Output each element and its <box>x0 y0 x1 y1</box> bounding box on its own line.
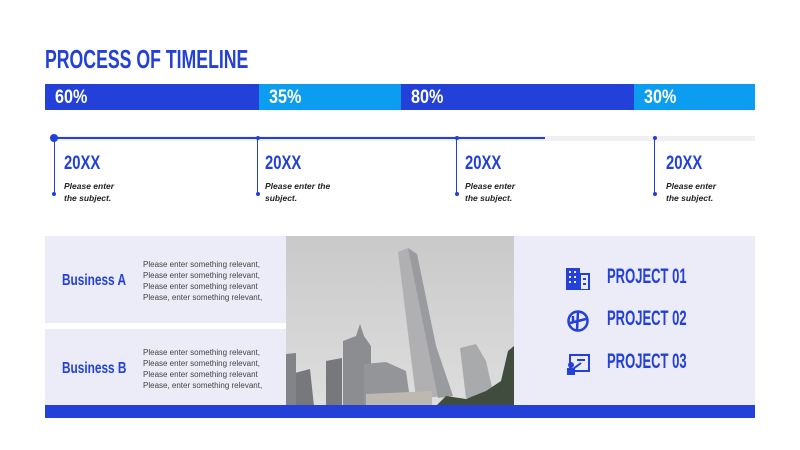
photo: skyscrapers <box>286 236 514 405</box>
panel: business B <box>45 329 286 405</box>
text: project 02: PROJECT 02 <box>607 307 687 330</box>
milestone 1: 20XX <box>64 153 100 174</box>
milestone 4 <box>653 136 716 203</box>
milestone 2: 20XX <box>265 153 301 174</box>
milestone 1: the subject. <box>64 193 111 203</box>
milestone 4: 20XX <box>666 153 702 174</box>
milestone 1: Please enter <box>64 181 114 191</box>
milestone 4: Please enter <box>666 181 716 191</box>
percentage bar: 30% <box>644 87 676 108</box>
panel: business A: Please, enter something relevant, <box>143 293 262 302</box>
panel: business A: Please enter something relevant, <box>143 271 260 280</box>
milestone 2 <box>256 136 330 203</box>
panel: business A <box>45 236 286 323</box>
milestone 3: the subject. <box>465 193 512 203</box>
percentage bar: 60% <box>55 87 87 108</box>
percentage bar <box>45 84 755 110</box>
text: project 03: PROJECT 03 <box>607 350 687 373</box>
timeline <box>50 134 755 142</box>
bottom bar <box>45 405 755 418</box>
percentage bar: 80% <box>411 87 443 108</box>
panel: business A: Business A <box>62 272 126 289</box>
percentage bar: 35% <box>269 87 301 108</box>
icon: chart <box>567 310 589 332</box>
milestone 3: Please enter <box>465 181 515 191</box>
panel: business A: Please enter something relevant <box>143 282 258 291</box>
milestone 2: Please enter the <box>265 181 330 191</box>
panel: projects <box>514 236 755 405</box>
milestone 3: 20XX <box>465 153 501 174</box>
title: PROCESS OF TIMELINE <box>45 44 248 74</box>
panel: business B: Please enter something relevant, <box>143 359 260 368</box>
milestone 4: the subject. <box>666 193 713 203</box>
panel: business B: Please enter something relevant, <box>143 348 260 357</box>
milestone 2: subject. <box>265 193 297 203</box>
panel: business A: Please enter something relevant, <box>143 260 260 269</box>
icon: building <box>566 268 590 290</box>
icon: presentation <box>567 354 590 375</box>
panel: business B: Please, enter something relevant, <box>143 381 262 390</box>
milestone 3 <box>455 136 516 203</box>
text: project 01: PROJECT 01 <box>607 265 687 288</box>
milestone 1 <box>52 142 114 203</box>
panel: business B: Business B <box>62 360 126 377</box>
panel: business B: Please enter something relevant <box>143 370 258 379</box>
